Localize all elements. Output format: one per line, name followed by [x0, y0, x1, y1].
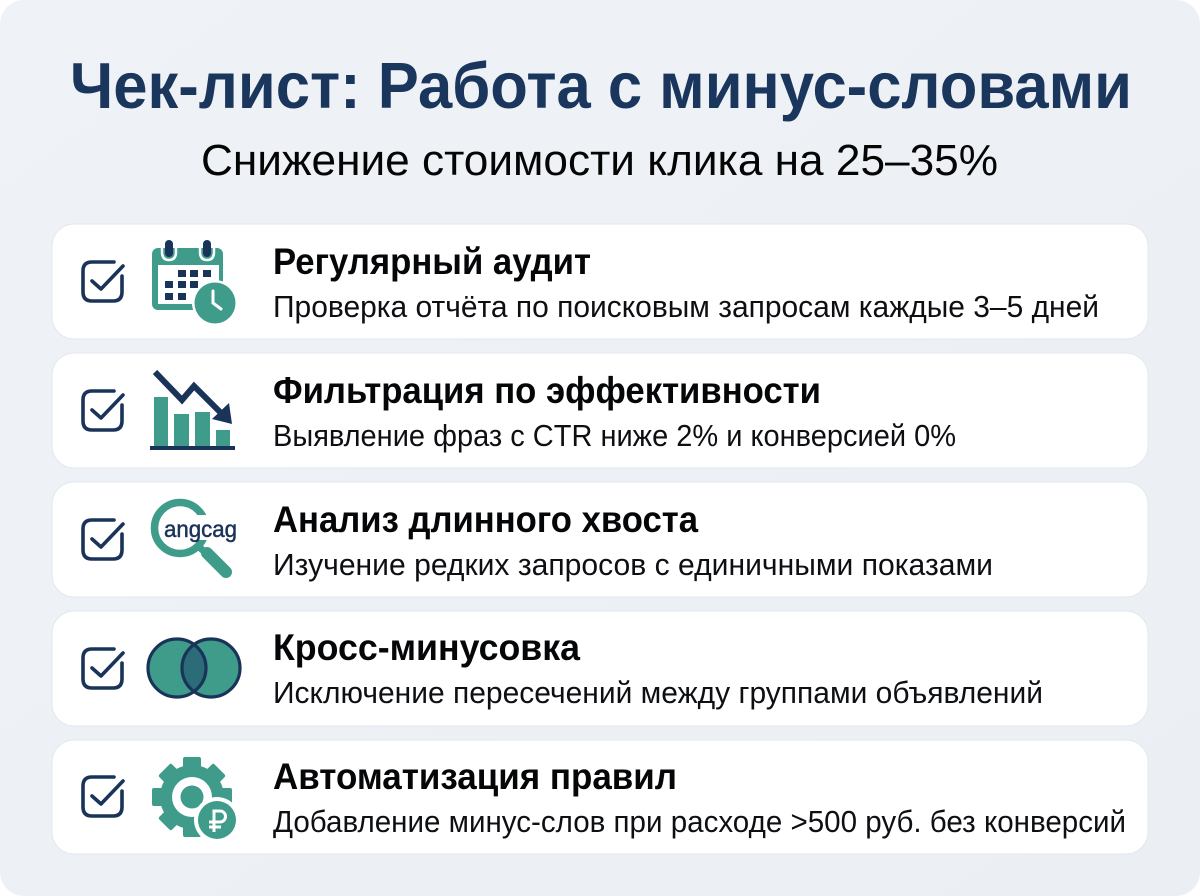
description: Добавление минус-слов при расходе >500 руб. без конверсий — [273, 804, 1126, 839]
heading: Фильтрация по эффективности — [273, 370, 821, 411]
icon: checkbox — [83, 391, 123, 430]
icon: checkbox — [83, 649, 123, 688]
heading: Регулярный аудит — [273, 241, 591, 282]
icon: checkbox — [83, 520, 123, 559]
icon: falling bar chart — [150, 372, 235, 450]
heading: Анализ длинного хвоста — [273, 499, 698, 540]
icon: magnifier: angcag — [164, 516, 237, 542]
panel: long tail analysis — [52, 482, 1148, 597]
icon: overlapping circles — [148, 639, 240, 697]
heading: Автоматизация правил — [273, 756, 677, 797]
panel: rule automation — [52, 740, 1148, 854]
description: Проверка отчёта по поисковым запросам каждые 3–5 дней — [273, 289, 1099, 324]
icon: checkbox — [83, 262, 123, 301]
title: Чек-лист: Работа с минус-словами — [70, 49, 1132, 122]
description: Исключение пересечений между группами объявлений — [273, 675, 1043, 710]
icon: checkbox — [83, 777, 123, 816]
description: Выявление фраз с CTR ниже 2% и конверсией 0% — [273, 418, 956, 453]
panel: cross negative keywords — [52, 611, 1148, 726]
panel: regular audit — [52, 224, 1148, 339]
panel: performance filtering — [52, 353, 1148, 468]
icon: magnifier — [154, 502, 240, 572]
description: Изучение редких запросов с единичными показами — [273, 547, 993, 582]
heading: Кросс-минусовка — [273, 627, 580, 668]
icon: calendar with clock — [152, 240, 238, 326]
icon: gear with ruble — [152, 757, 240, 843]
subtitle: Снижение стоимости клика на 25–35% — [201, 136, 998, 185]
